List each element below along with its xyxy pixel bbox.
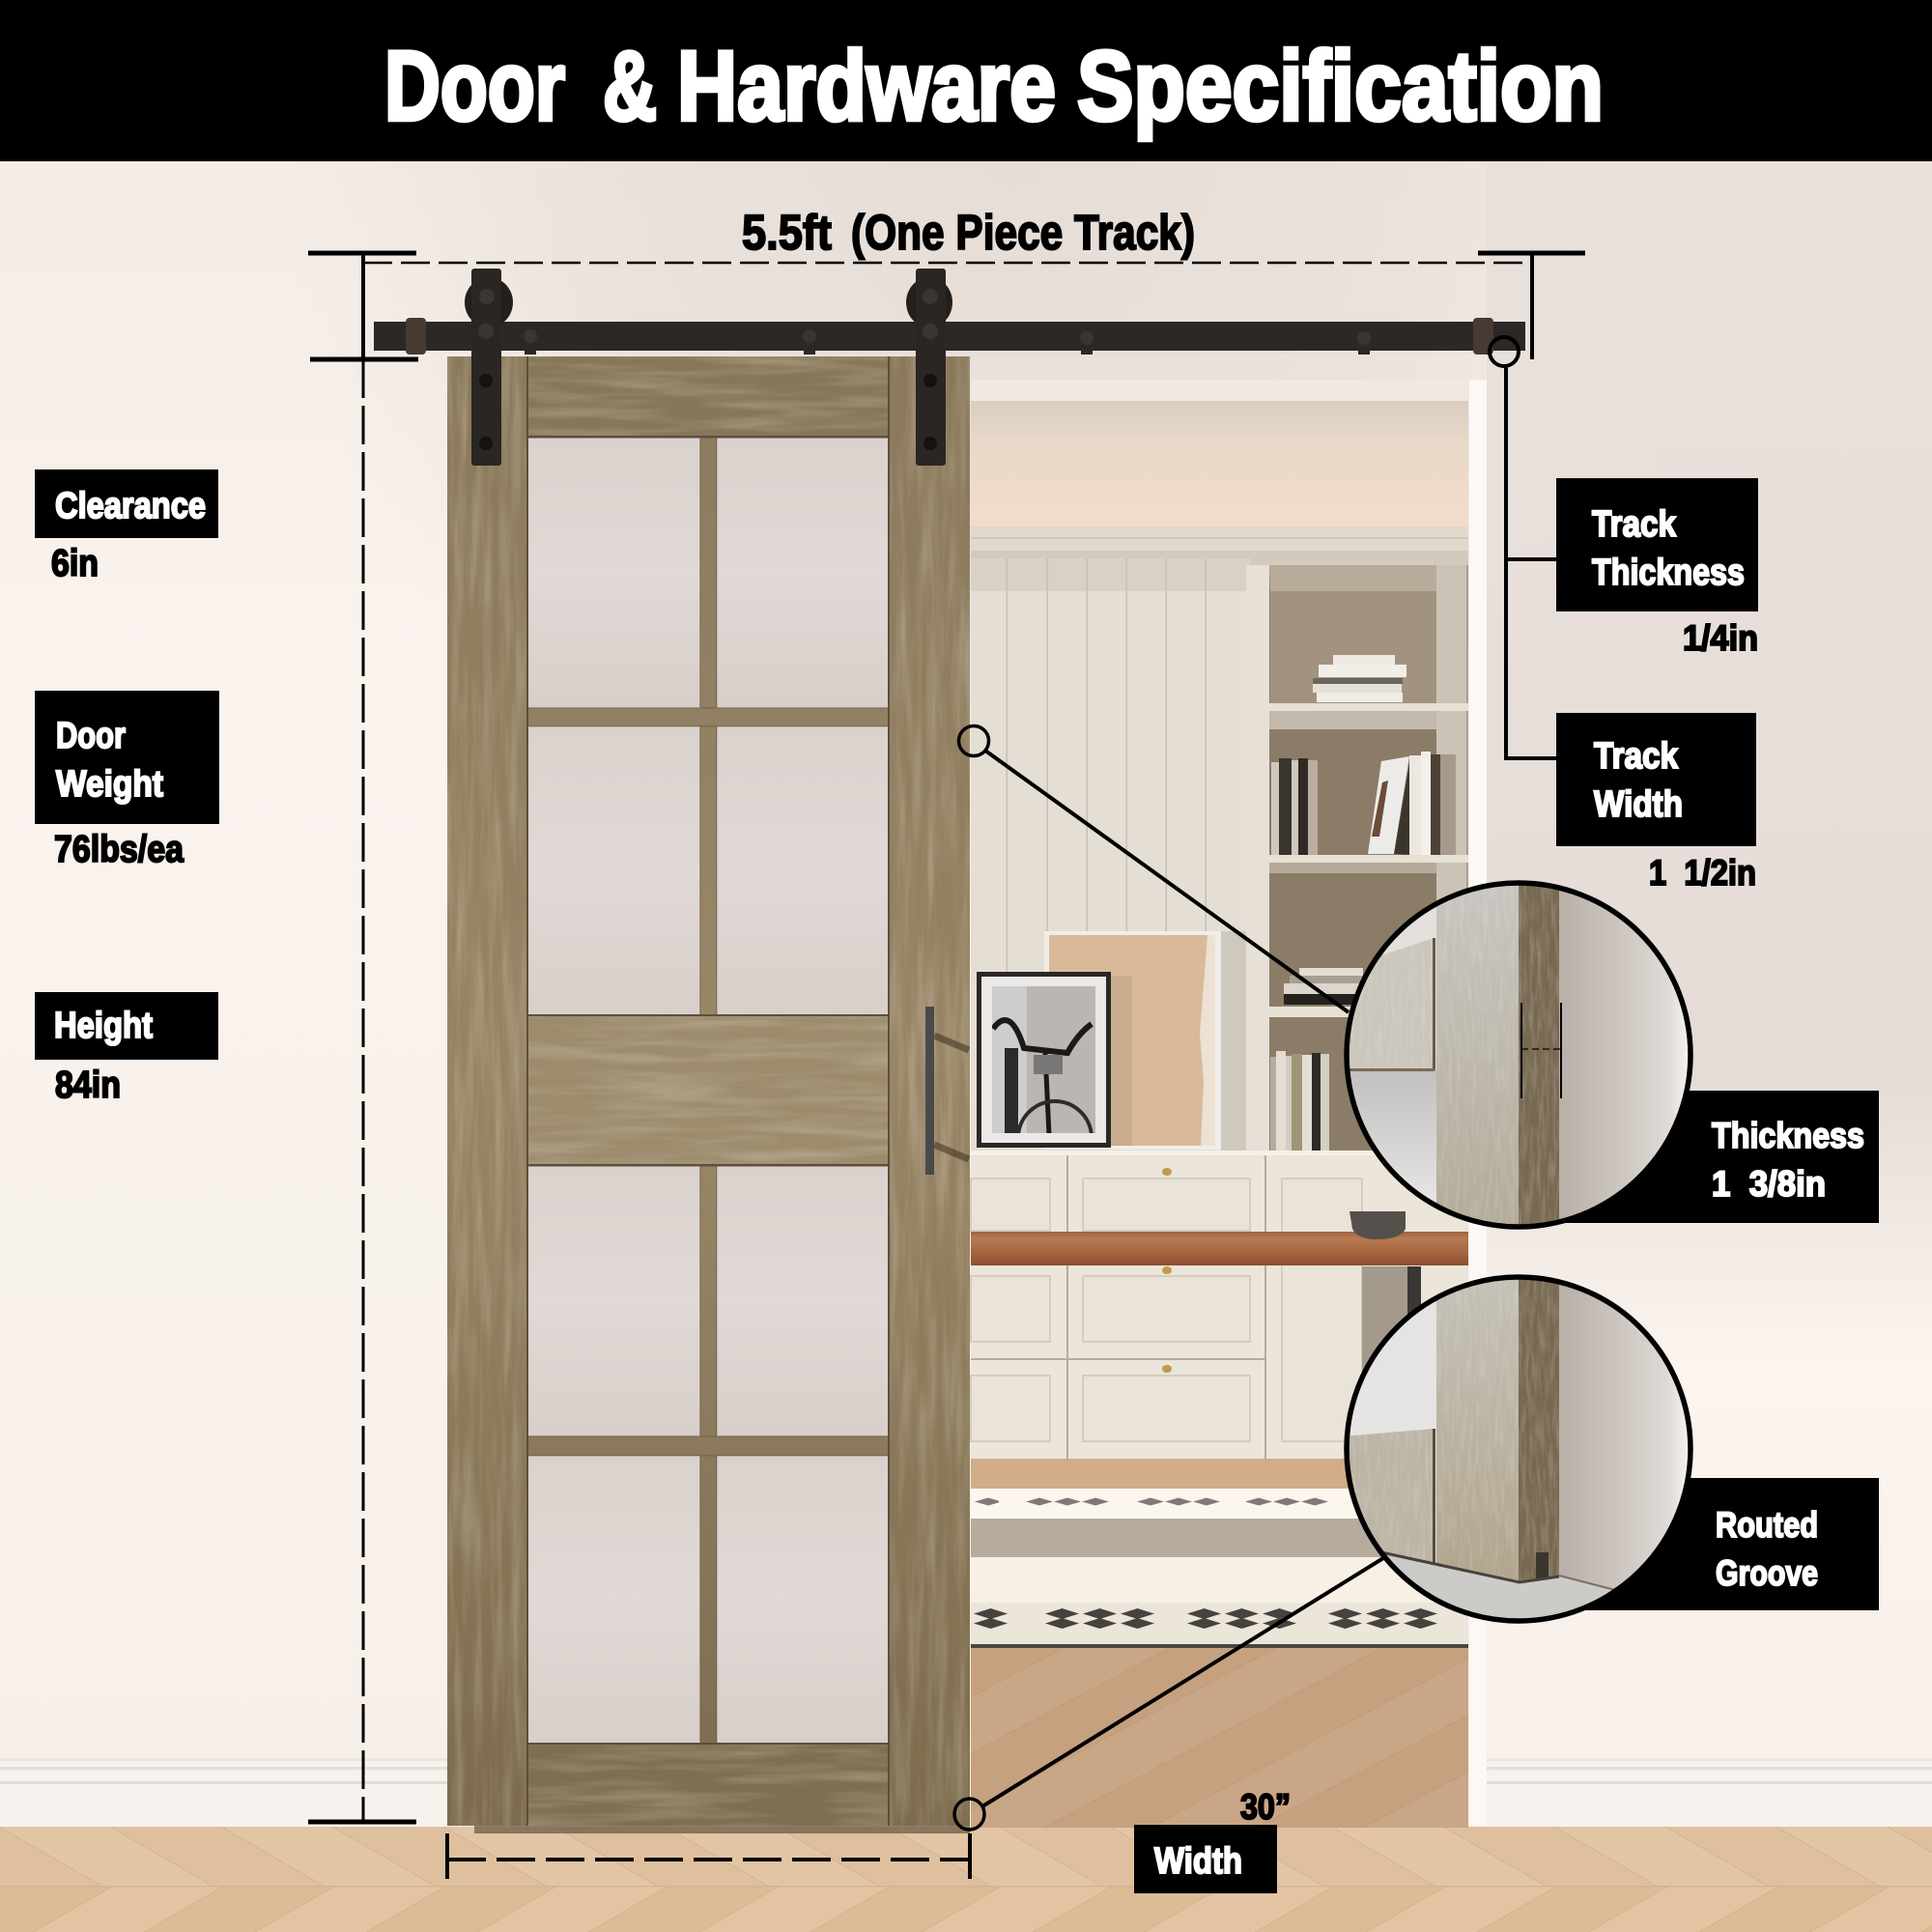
track thickness value: 1/4in xyxy=(1683,618,1758,658)
rails tint xyxy=(528,356,890,1826)
routed groove leader xyxy=(954,1558,1383,1830)
framed watercolor art xyxy=(1044,931,1221,1150)
door casing xyxy=(971,380,1487,1826)
door pull handle xyxy=(925,1007,969,1175)
crown moulding xyxy=(971,526,1468,565)
door weight label: Weight xyxy=(56,764,163,805)
door weight value: 76lbs/ea xyxy=(54,829,184,870)
thickness label: Thickness xyxy=(1712,1116,1864,1155)
track width value: 1 1/2in xyxy=(1649,853,1756,893)
track length label xyxy=(742,205,1195,260)
height value: 84in xyxy=(55,1065,121,1106)
sliding barn door xyxy=(447,356,970,1826)
books third shelf xyxy=(1284,968,1363,1005)
title bar: Specification xyxy=(1077,31,1604,141)
routed groove label: Groove xyxy=(1716,1553,1818,1593)
framed bicycle photograph xyxy=(977,972,1111,1148)
title bar: Hardware xyxy=(677,31,1056,141)
track width label xyxy=(1556,713,1756,846)
hardwood strip xyxy=(971,1459,1468,1490)
track width label: Width xyxy=(1594,784,1683,825)
books bottom shelf xyxy=(1270,1051,1329,1151)
detail magnifier: routed groove xyxy=(1343,1273,1694,1633)
clearance label: Clearance xyxy=(55,486,206,526)
bookcase xyxy=(1246,565,1468,1151)
title bar: & xyxy=(603,31,657,141)
door shadow on floor xyxy=(474,1825,970,1833)
height dimension line xyxy=(308,359,416,1822)
thickness ticks xyxy=(1521,1003,1561,1098)
track length label: 5.5ft xyxy=(742,205,832,260)
door weight label: Door xyxy=(56,716,126,756)
routed groove label: Routed xyxy=(1716,1505,1818,1545)
wooden floor foreground xyxy=(0,1827,1932,1932)
track width label: Track xyxy=(1594,736,1679,777)
ceiling glow xyxy=(971,401,1468,526)
width label: Width xyxy=(1154,1841,1242,1882)
right hanger strap xyxy=(906,269,952,466)
door thickness leader xyxy=(958,726,1349,1012)
title bar xyxy=(0,0,1932,161)
baseboard left xyxy=(0,1758,447,1827)
baseboard right xyxy=(1487,1758,1932,1827)
door frame wood xyxy=(447,356,970,1826)
height label: Height xyxy=(54,1006,153,1046)
track thickness label: Thickness xyxy=(1592,553,1745,593)
interior parquet floor xyxy=(971,1648,1468,1828)
track thickness label xyxy=(1556,478,1758,611)
width label xyxy=(1134,1825,1277,1893)
wainscot panel wall xyxy=(971,558,1251,1151)
wood grain on rails xyxy=(528,356,890,1826)
wood grain on stiles xyxy=(447,356,970,1826)
books top shelf xyxy=(1313,655,1406,702)
patterned rug xyxy=(971,1489,1468,1648)
glass panes xyxy=(528,438,890,1743)
title bar: Door xyxy=(384,31,565,141)
routed groove label xyxy=(1526,1478,1879,1610)
thickness label: 1 3/8in xyxy=(1712,1164,1826,1204)
height label xyxy=(35,992,218,1060)
width dimension line xyxy=(447,1833,970,1879)
width value: 30” xyxy=(1240,1787,1291,1827)
clearance label xyxy=(35,469,218,538)
books second shelf xyxy=(1271,752,1456,855)
detail magnifier: door thickness xyxy=(1343,879,1694,1235)
track length label: (One Piece Track) xyxy=(851,205,1195,260)
room interior seen through doorway xyxy=(971,401,1468,1828)
dark bowl xyxy=(1350,1211,1406,1239)
track callout leader xyxy=(1490,337,1556,758)
door weight label xyxy=(35,691,219,824)
rail and stile edges xyxy=(526,356,890,1826)
end stops xyxy=(406,318,426,355)
cabinet run xyxy=(971,1151,1468,1464)
track thickness label: Track xyxy=(1592,504,1677,545)
wooden counter xyxy=(971,1232,1468,1265)
track length dimension xyxy=(308,253,1585,359)
clearance value: 6in xyxy=(51,543,99,584)
gold knobs xyxy=(1162,1168,1172,1373)
thickness label xyxy=(1526,1091,1879,1223)
left hanger strap xyxy=(465,269,513,466)
barn door track xyxy=(374,318,1525,355)
